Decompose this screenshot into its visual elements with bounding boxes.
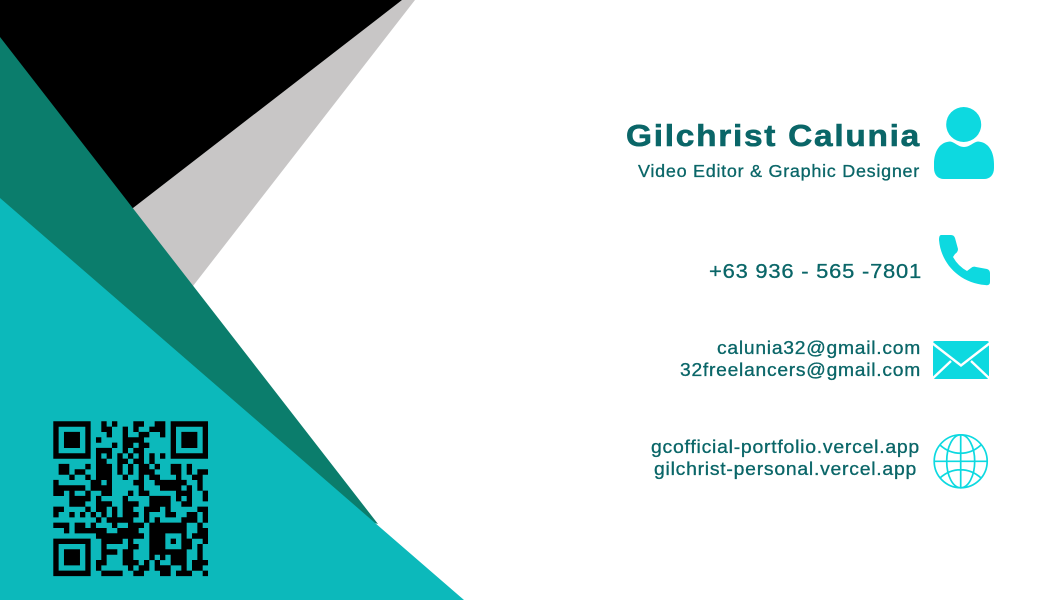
icon: person: [934, 107, 994, 179]
QR code: [53, 424, 208, 573]
icon: phone: [939, 235, 990, 285]
website addresses: [651, 437, 920, 479]
icon: envelope: [932, 341, 990, 379]
website addresses: gilchrist-personal.vercel.app: [654, 459, 917, 479]
phone number: +63 936 - 565 -7801: [709, 261, 922, 283]
shape: dark teal triangle: [0, 37, 378, 524]
email addresses: 32freelancers@gmail.com: [680, 360, 921, 380]
shape: gray triangle: [120, 0, 415, 286]
email addresses: [680, 338, 921, 380]
website addresses: gcofficial-portfolio.vercel.app: [651, 437, 920, 457]
name heading: Gilchrist Calunia: [626, 118, 921, 153]
shape: teal triangle: [0, 198, 464, 600]
job title: Video Editor & Graphic Designer: [638, 161, 920, 181]
icon: globe: [934, 435, 987, 488]
shape: black triangle: [0, 0, 402, 210]
email addresses: calunia32@gmail.com: [717, 338, 921, 358]
